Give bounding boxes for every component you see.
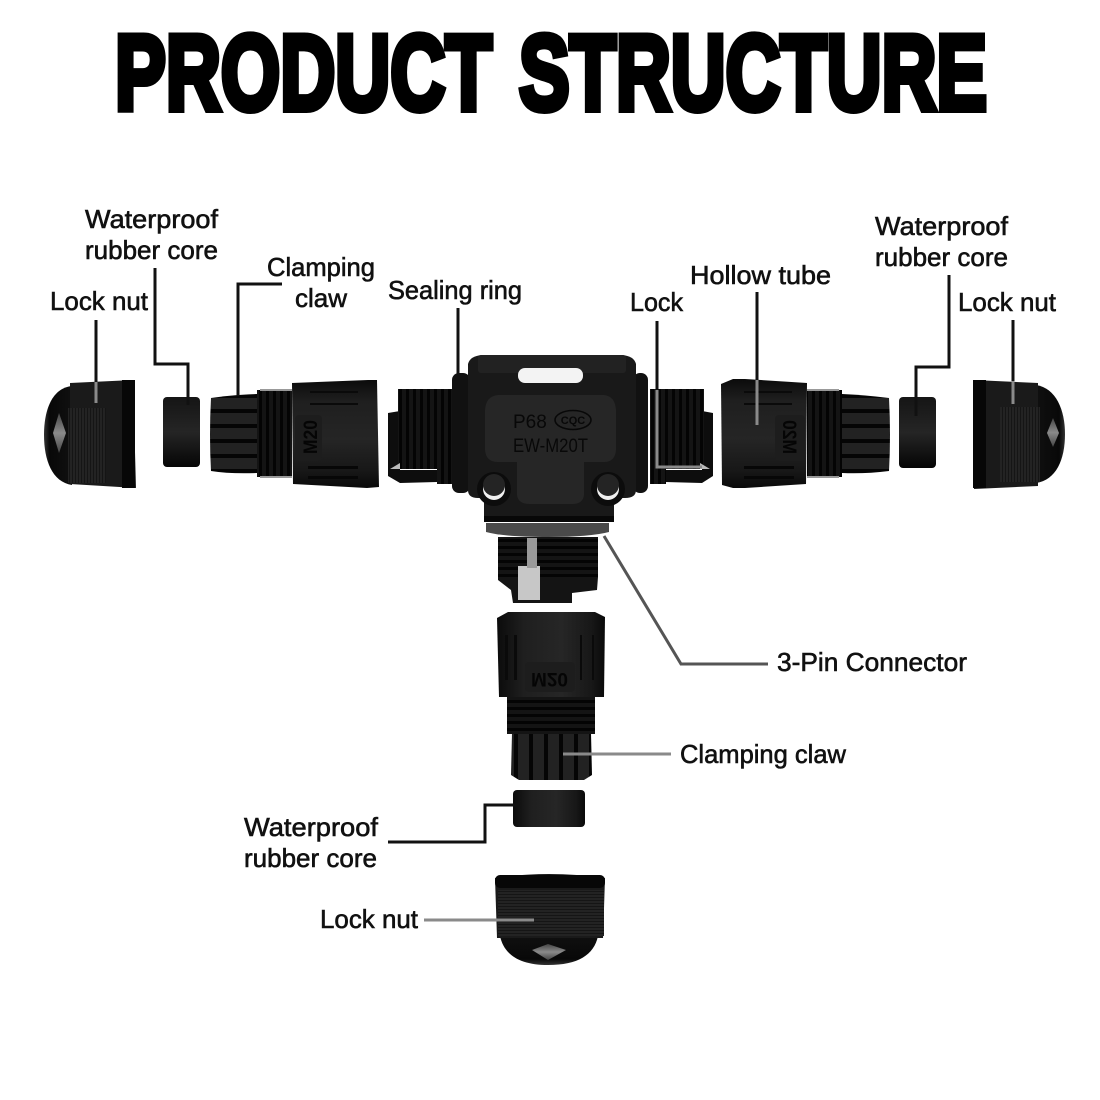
right lock nut <box>973 380 1065 489</box>
right rubber core <box>899 397 936 468</box>
bottom lock nut <box>495 874 605 965</box>
left tube with clamping claw <box>210 380 379 488</box>
callout: waterproof rubber core left: rubber core <box>85 235 218 265</box>
mounting slot <box>518 368 583 383</box>
CQC logo <box>555 410 591 430</box>
callout: clamping claw left: Clamping <box>267 252 375 282</box>
left lock nut <box>44 380 136 488</box>
callout: hollow tube: Hollow tube <box>690 260 831 290</box>
left central thread and locks <box>388 389 453 484</box>
callout: 3-pin connector: 3-Pin Connector <box>777 647 967 677</box>
callout: waterproof rubber core right: rubber core <box>875 242 1008 272</box>
engraved M20 mirrored: M20 <box>778 420 799 454</box>
callout: waterproof rubber core right <box>875 211 1009 416</box>
callout: waterproof rubber core bottom: Waterproof <box>244 812 379 842</box>
callout: lock nut right: Lock nut <box>958 287 1057 317</box>
callout: waterproof rubber core bottom: rubber core <box>244 843 377 873</box>
engraved model text: P68 <box>513 412 547 433</box>
callout: 3-pin connector <box>604 536 967 677</box>
right screw hole <box>591 472 625 506</box>
label plate <box>485 395 616 504</box>
callout: sealing ring: Sealing ring <box>388 275 522 305</box>
callout: waterproof rubber core left: Waterproof <box>85 204 219 234</box>
callout: waterproof rubber core bottom <box>244 805 520 873</box>
title: PRODUCT <box>115 12 492 132</box>
callout: lock <box>630 287 702 467</box>
callout: lock nut bottom: Lock nut <box>320 904 419 934</box>
bottom rubber core <box>513 790 585 827</box>
callout: clamping claw bottom: Clamping claw <box>680 739 846 769</box>
bottom tube with clamping claw <box>497 612 605 780</box>
callout: lock nut right <box>958 287 1057 404</box>
engraved M20 flipped: M20 <box>531 668 568 689</box>
engraved model number: EW-M20T <box>513 436 588 457</box>
o-ring: sealing ring <box>486 523 609 537</box>
left screw hole <box>477 472 511 506</box>
callout: waterproof rubber core right: Waterproof <box>875 211 1009 241</box>
title <box>115 12 987 132</box>
callout: lock nut left: Lock nut <box>50 286 149 316</box>
right central thread and locks <box>650 389 713 484</box>
engraved M20: M20 <box>301 420 322 454</box>
callout: waterproof rubber core left <box>85 204 219 405</box>
callout: lock nut left <box>50 286 149 403</box>
T-body housing <box>452 355 648 603</box>
callout: clamping claw left <box>238 252 375 396</box>
CQC logo: CQC <box>561 415 585 427</box>
callout: clamping claw left: claw <box>295 283 347 313</box>
callout: sealing ring <box>388 275 522 382</box>
left rubber core <box>163 397 200 467</box>
callout: lock: Lock <box>630 287 684 317</box>
right tube with clamping claw <box>721 379 890 488</box>
